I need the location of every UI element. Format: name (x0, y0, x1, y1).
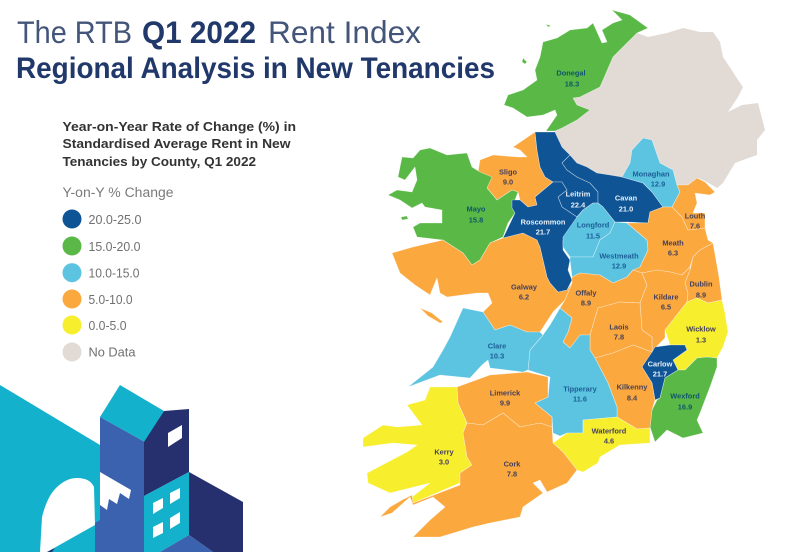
county: Carlow: 21.7 (653, 370, 667, 379)
county: Westmeath: Westmeath (599, 252, 639, 261)
county: Dublin: 8.9 (696, 291, 706, 300)
county: Roscommon: 21.7 (536, 228, 550, 237)
county: Westmeath (570, 222, 648, 283)
building illustration (0, 385, 243, 552)
county: Sligo: 9.0 (503, 178, 513, 187)
county: Louth: 7.6 (690, 222, 700, 231)
county: Galway: Galway (511, 283, 538, 292)
legend: 0.0-5.0 (88, 318, 126, 333)
county: Offaly: 8.9 (581, 299, 591, 308)
legend: Y-on-Y % Change (62, 185, 174, 200)
county: Kilkenny: Kilkenny (617, 383, 648, 392)
county: Dublin: Dublin (690, 280, 713, 289)
county: Cork: 7.8 (507, 470, 517, 479)
county: Roscommon (503, 182, 577, 292)
county: Sligo: Sligo (499, 168, 518, 177)
county: Kildare (640, 267, 690, 352)
county: Waterford (553, 417, 650, 472)
county: Meath (627, 207, 713, 275)
legend: 10.0-15.0 (88, 266, 140, 281)
legend: No Data (88, 344, 136, 360)
title: Rent Index (268, 14, 421, 50)
legend heading: Year-on-Year Rate of Change (%) in (62, 119, 296, 134)
county: Monaghan: Monaghan (633, 170, 670, 179)
county: Leitrim: 22.4 (571, 201, 586, 210)
county: Leitrim (535, 132, 598, 217)
county: Kildare: 6.5 (661, 303, 671, 312)
county: Roscommon: Roscommon (521, 218, 566, 227)
county: Cork: Cork (504, 460, 521, 469)
county: Waterford: Waterford (592, 427, 627, 436)
county: Cork (380, 413, 577, 537)
legend heading: Standardised Average Rent in New (62, 136, 291, 151)
county: Wicklow: Wicklow (686, 325, 716, 334)
county: Longford: Longford (577, 221, 610, 230)
county: Limerick (457, 372, 552, 427)
county: Laois (590, 302, 652, 358)
county: Leitrim: Leitrim (566, 190, 591, 199)
county: Kerry: 3.0 (439, 458, 449, 467)
county: Laois: 7.8 (614, 333, 624, 342)
county: Kildare: Kildare (653, 293, 679, 302)
county: Northern Ireland, no data (555, 28, 765, 188)
county: Kilkenny (595, 345, 655, 429)
county: Meath: Meath (662, 239, 684, 248)
legend: 5.0-10.0 (88, 292, 132, 307)
county: Wexford: Wexford (670, 392, 700, 401)
legend: 15.0-20.0 (88, 239, 140, 254)
county: Clare: Clare (488, 342, 506, 351)
map of Ireland (363, 10, 765, 537)
county: Wexford: 16.9 (678, 403, 692, 412)
county: Wicklow: 1.3 (696, 336, 706, 345)
county: Tipperary: Tipperary (563, 385, 598, 394)
county: Offaly (560, 270, 647, 348)
county: Mayo: Mayo (467, 205, 486, 214)
county: Westmeath: 12.9 (612, 262, 626, 271)
county: Clare: 10.3 (490, 352, 504, 361)
county: Cavan: 21.0 (619, 205, 633, 214)
county: Louth (672, 178, 715, 231)
county: Carlow: Carlow (648, 360, 673, 369)
legend heading: Tenancies by County, Q1 2022 (62, 154, 256, 169)
county: Kilkenny: 8.4 (627, 394, 638, 403)
county: Carlow (642, 345, 687, 400)
county: Meath: 6.3 (668, 249, 678, 258)
county: Kerry: Kerry (434, 448, 455, 457)
county: Mayo (388, 148, 518, 265)
county: Laois: Laois (609, 323, 629, 332)
county: Longford: 11.5 (586, 232, 600, 241)
county: Wicklow (665, 298, 728, 370)
county: Offaly: Offaly (576, 289, 597, 298)
county: Donegal: 18.3 (565, 80, 579, 89)
county: Donegal (504, 10, 648, 131)
county: Tipperary: 11.6 (573, 395, 587, 404)
legend (62, 185, 174, 362)
county: Wexford (650, 357, 717, 442)
county: Limerick: Limerick (490, 389, 521, 398)
county: Clare (408, 308, 543, 387)
county: Galway: 6.2 (519, 293, 529, 302)
county: Louth: Louth (685, 212, 706, 221)
county: Sligo (478, 132, 553, 207)
county: Longford (563, 203, 615, 257)
county: Galway (392, 233, 572, 332)
county: Mayo: 15.8 (469, 216, 483, 225)
county: Limerick: 9.9 (500, 399, 510, 408)
county: Cavan: Cavan (615, 194, 638, 203)
county: Kerry (363, 387, 472, 503)
county: Cavan (562, 155, 663, 223)
county: Waterford: 4.6 (604, 437, 614, 446)
county: Monaghan (622, 138, 680, 207)
title: Regional Analysis in New Tenancies (16, 52, 495, 85)
title: The RTB (17, 14, 132, 50)
county: Tipperary (528, 308, 617, 436)
county: Monaghan: 12.9 (651, 180, 665, 189)
legend heading (62, 119, 296, 169)
legend: 20.0-25.0 (88, 212, 142, 227)
county: Dublin (685, 243, 722, 303)
county: Donegal: Donegal (556, 69, 586, 78)
title (16, 14, 495, 85)
title: Q1 2022 (142, 14, 256, 50)
